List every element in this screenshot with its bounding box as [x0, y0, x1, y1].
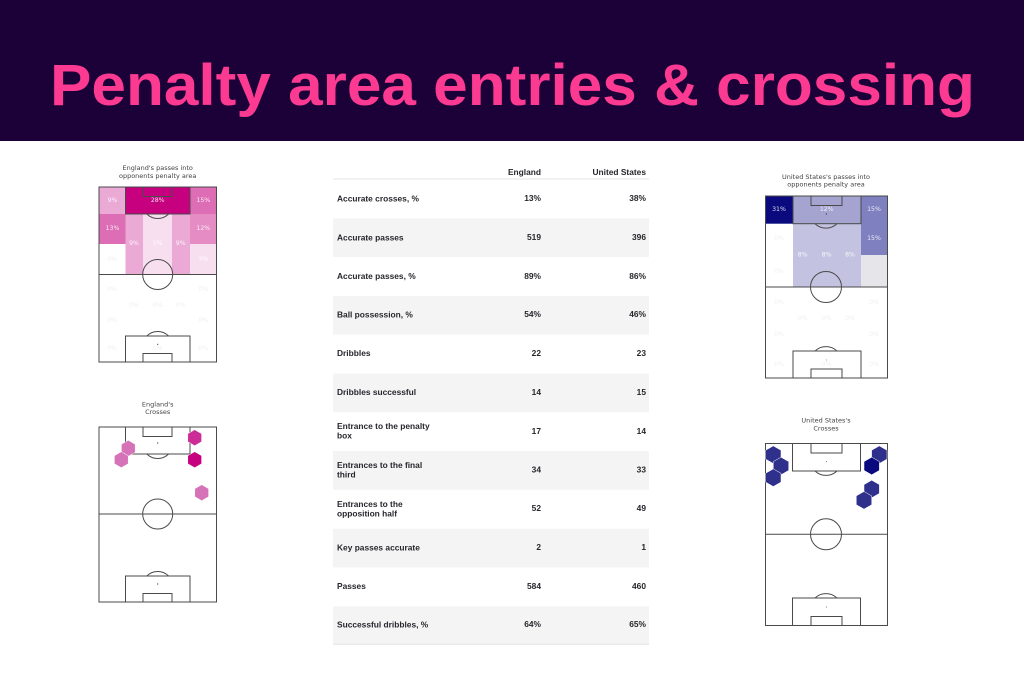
row: Entrances to the opposition half: Entrances to the [337, 499, 403, 509]
row: Passes [333, 568, 649, 606]
row: Passes: 460 [632, 581, 646, 591]
heading: United States passes: opponents penalty area [787, 180, 865, 188]
row: Accurate crosses [333, 180, 649, 218]
percentage labels: England: 9% [108, 197, 118, 204]
percentage labels: England: 0% [107, 286, 117, 293]
row: Key passes accurate: 2 [536, 542, 541, 552]
percentage labels: England: 0% [198, 286, 208, 293]
heading: England passes: opponents penalty area [119, 172, 196, 180]
pitch lines: United States crosses [766, 444, 888, 626]
pitch lines: England passes [99, 187, 216, 362]
percentage labels: United States: 0% [774, 299, 784, 306]
percentage labels: England: 12% [196, 225, 210, 232]
percentage labels: United States: 8% [845, 252, 855, 258]
row: Dribbles successful: 15 [637, 387, 646, 397]
row: Entrances to the opposition half: opposition half [337, 508, 397, 518]
table header: United States [592, 167, 646, 177]
heading: United States crosses: United States's [801, 416, 851, 424]
row: Accurate crosses: 38% [629, 193, 647, 203]
percentage labels: England: 0% [198, 317, 208, 324]
heatmap cells: England [99, 187, 216, 274]
row: Ball possession: 46% [629, 309, 647, 319]
percentage labels: England: 5% [153, 240, 163, 247]
row: Passes: Passes [337, 581, 366, 591]
row: Entrances to the final third: third [337, 470, 356, 480]
title: Penalty area entries & crossing [50, 53, 975, 118]
row: Accurate passes percent: 89% [524, 271, 542, 281]
percentage labels: England: 15% [196, 197, 210, 204]
percentage labels: United States: 0% [774, 268, 784, 275]
heatmap cells: United States [766, 196, 888, 287]
row: Accurate passes: 396 [632, 232, 646, 242]
row: Entrances to the final third: Entrances to the final [337, 460, 422, 470]
panel: England crosses [99, 400, 216, 602]
heading: United States passes [782, 173, 870, 188]
row: Successful dribbles: Successful dribbles, % [337, 620, 429, 630]
row: Entrance to the penalty box: 14 [637, 426, 646, 436]
row: Entrances to the final third [333, 451, 649, 490]
panel: England passes heatmap [99, 164, 216, 362]
row: Key passes accurate: Key passes accurate [337, 542, 420, 552]
heading: United States crosses: Crosses [813, 424, 839, 432]
percentage labels: United States: 8% [798, 252, 808, 258]
row: Dribbles: 22 [532, 348, 541, 358]
heading: England crosses: Crosses [145, 408, 171, 416]
heading: England passes: England's passes into [122, 164, 193, 172]
row: Dribbles successful: 14 [532, 387, 541, 397]
percentage labels: United States: 31% [772, 206, 786, 213]
row: Successful dribbles: 65% [629, 619, 647, 629]
header banner [0, 0, 1024, 141]
row: Successful dribbles [333, 606, 649, 644]
row: Ball possession: Ball possession, % [337, 310, 413, 320]
percentage labels: England: 0% [198, 345, 208, 352]
row: Entrances to the opposition half [333, 490, 649, 529]
row: Accurate passes percent: 86% [629, 271, 647, 281]
percentage labels: England: 28% [151, 197, 165, 204]
row: Accurate crosses: Accurate crosses, % [337, 194, 419, 204]
row: Key passes accurate: 1 [641, 542, 646, 552]
row: Accurate crosses: 13% [524, 193, 542, 203]
row: Accurate passes percent: Accurate passes, % [337, 271, 416, 281]
crosses hexagons: England [114, 430, 209, 501]
row: Entrance to the penalty box: box [337, 430, 352, 440]
crosses hexagons: United States [766, 446, 887, 509]
percentage labels: United States: 0% [869, 361, 879, 368]
percentage labels: England: 0% [176, 302, 186, 309]
percentage labels: United States: 0% [774, 235, 784, 242]
row: Ball possession: 54% [524, 309, 542, 319]
percentage labels: England: 13% [106, 225, 119, 232]
percentage labels: England: 0% [107, 317, 117, 324]
percentage labels: United States: 0% [822, 315, 832, 322]
percentage labels: England: 9% [129, 240, 139, 247]
row: Entrances to the opposition half: 52 [532, 503, 541, 513]
row: Successful dribbles: 64% [524, 619, 542, 629]
row: Entrance to the penalty box [333, 412, 649, 451]
row: Dribbles successful [333, 374, 649, 412]
table header: England [508, 167, 541, 177]
percentage labels: England: 9% [176, 240, 186, 247]
percentage labels: United States: 0% [869, 299, 879, 306]
percentage labels: United States [772, 206, 881, 368]
row: Dribbles: 23 [637, 348, 646, 358]
percentage labels: United States: 0% [774, 331, 784, 338]
row: Accurate passes percent [333, 257, 649, 296]
row: Entrances to the final third: 33 [637, 464, 646, 474]
row: Entrance to the penalty box: Entrance to the penalty [337, 421, 430, 431]
row: Ball possession [333, 296, 649, 335]
panel: stats table [333, 167, 649, 644]
heading: United States passes: United States's passes into [782, 173, 870, 181]
percentage labels: United States: 0% [869, 331, 879, 338]
row: Entrance to the penalty box: 17 [532, 426, 541, 436]
row: Dribbles: Dribbles [337, 348, 371, 358]
row: Entrances to the final third: 34 [532, 464, 541, 474]
percentage labels: England: 0% [107, 345, 117, 352]
pitch lines: England crosses [99, 427, 216, 602]
row: Entrances to the opposition half: 49 [637, 503, 646, 513]
percentage labels: United States: 15% [867, 206, 881, 213]
row: Accurate passes [333, 218, 649, 257]
percentage labels: United States: 12% [820, 206, 834, 213]
percentage labels: United States: 0% [845, 315, 855, 322]
panel: United States passes heatmap [766, 173, 888, 378]
percentage labels: England: 3% [198, 256, 208, 263]
panel: United States crosses [766, 416, 888, 626]
percentage labels: England [106, 197, 210, 352]
percentage labels: United States: 0% [798, 315, 808, 322]
heading: England passes [119, 164, 196, 180]
row: Key passes accurate [333, 529, 649, 568]
row: Dribbles [333, 335, 649, 374]
heading: England crosses: England's [142, 400, 174, 408]
row: Passes: 584 [527, 581, 541, 591]
percentage labels: England: 0% [153, 345, 163, 352]
row: Dribbles successful: Dribbles successful [337, 387, 416, 397]
percentage labels: England: 0% [129, 302, 139, 309]
pitch lines: United States passes [766, 196, 888, 378]
percentage labels: United States: 8% [822, 252, 832, 258]
row: Accurate passes: 519 [527, 232, 541, 242]
percentage labels: United States: 15% [867, 235, 881, 242]
percentage labels: England: 0% [107, 256, 117, 263]
table header [333, 167, 649, 179]
row: Accurate passes: Accurate passes [337, 232, 404, 242]
heading: United States crosses [801, 416, 851, 432]
percentage labels: United States: 0% [774, 361, 784, 368]
percentage labels: England: 0% [153, 302, 163, 309]
heading: England crosses [142, 400, 174, 416]
percentage labels: United States: 0% [822, 361, 832, 368]
